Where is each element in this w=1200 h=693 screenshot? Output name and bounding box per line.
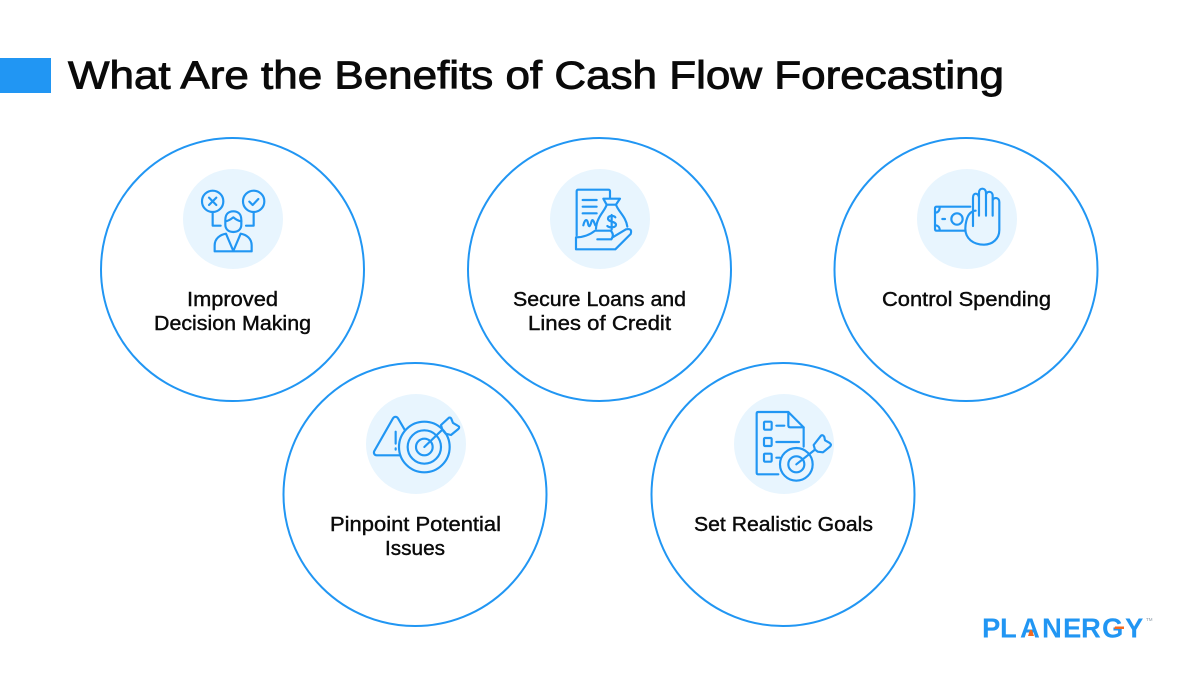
icon: checklist and target (757, 412, 831, 481)
title accent block (0, 58, 51, 93)
icon: warning triangle and target (374, 417, 459, 472)
label: Control Spending (882, 289, 1051, 311)
label: Improved (187, 289, 278, 311)
panel: set realistic goals (652, 363, 914, 626)
label: Pinpoint Potential (330, 514, 501, 536)
panel: improved decision making (101, 138, 364, 401)
panel: secure loans and lines of credit: Lines of Credit (528, 313, 671, 335)
panel: control spending (834, 138, 1098, 401)
logo: PLANERGY: PLANERGY (982, 612, 1143, 644)
logo: PLANERGY: TM (1146, 617, 1153, 622)
title: What Are the Benefits of Cash Flow Forecasting (68, 54, 1004, 98)
icon: document, money bag and hand (576, 190, 631, 249)
panel: pinpoint potential issues: Issues (385, 538, 445, 560)
panel: secure loans and lines of credit (468, 138, 731, 401)
panel: improved decision making: Decision Making (154, 313, 311, 335)
panel: pinpoint potential issues (284, 363, 546, 626)
label: Secure Loans and (513, 289, 686, 311)
icon: hand stopping banknote (935, 189, 999, 245)
icon: decision maker with cross and check (202, 191, 264, 251)
label: Set Realistic Goals (694, 514, 873, 536)
